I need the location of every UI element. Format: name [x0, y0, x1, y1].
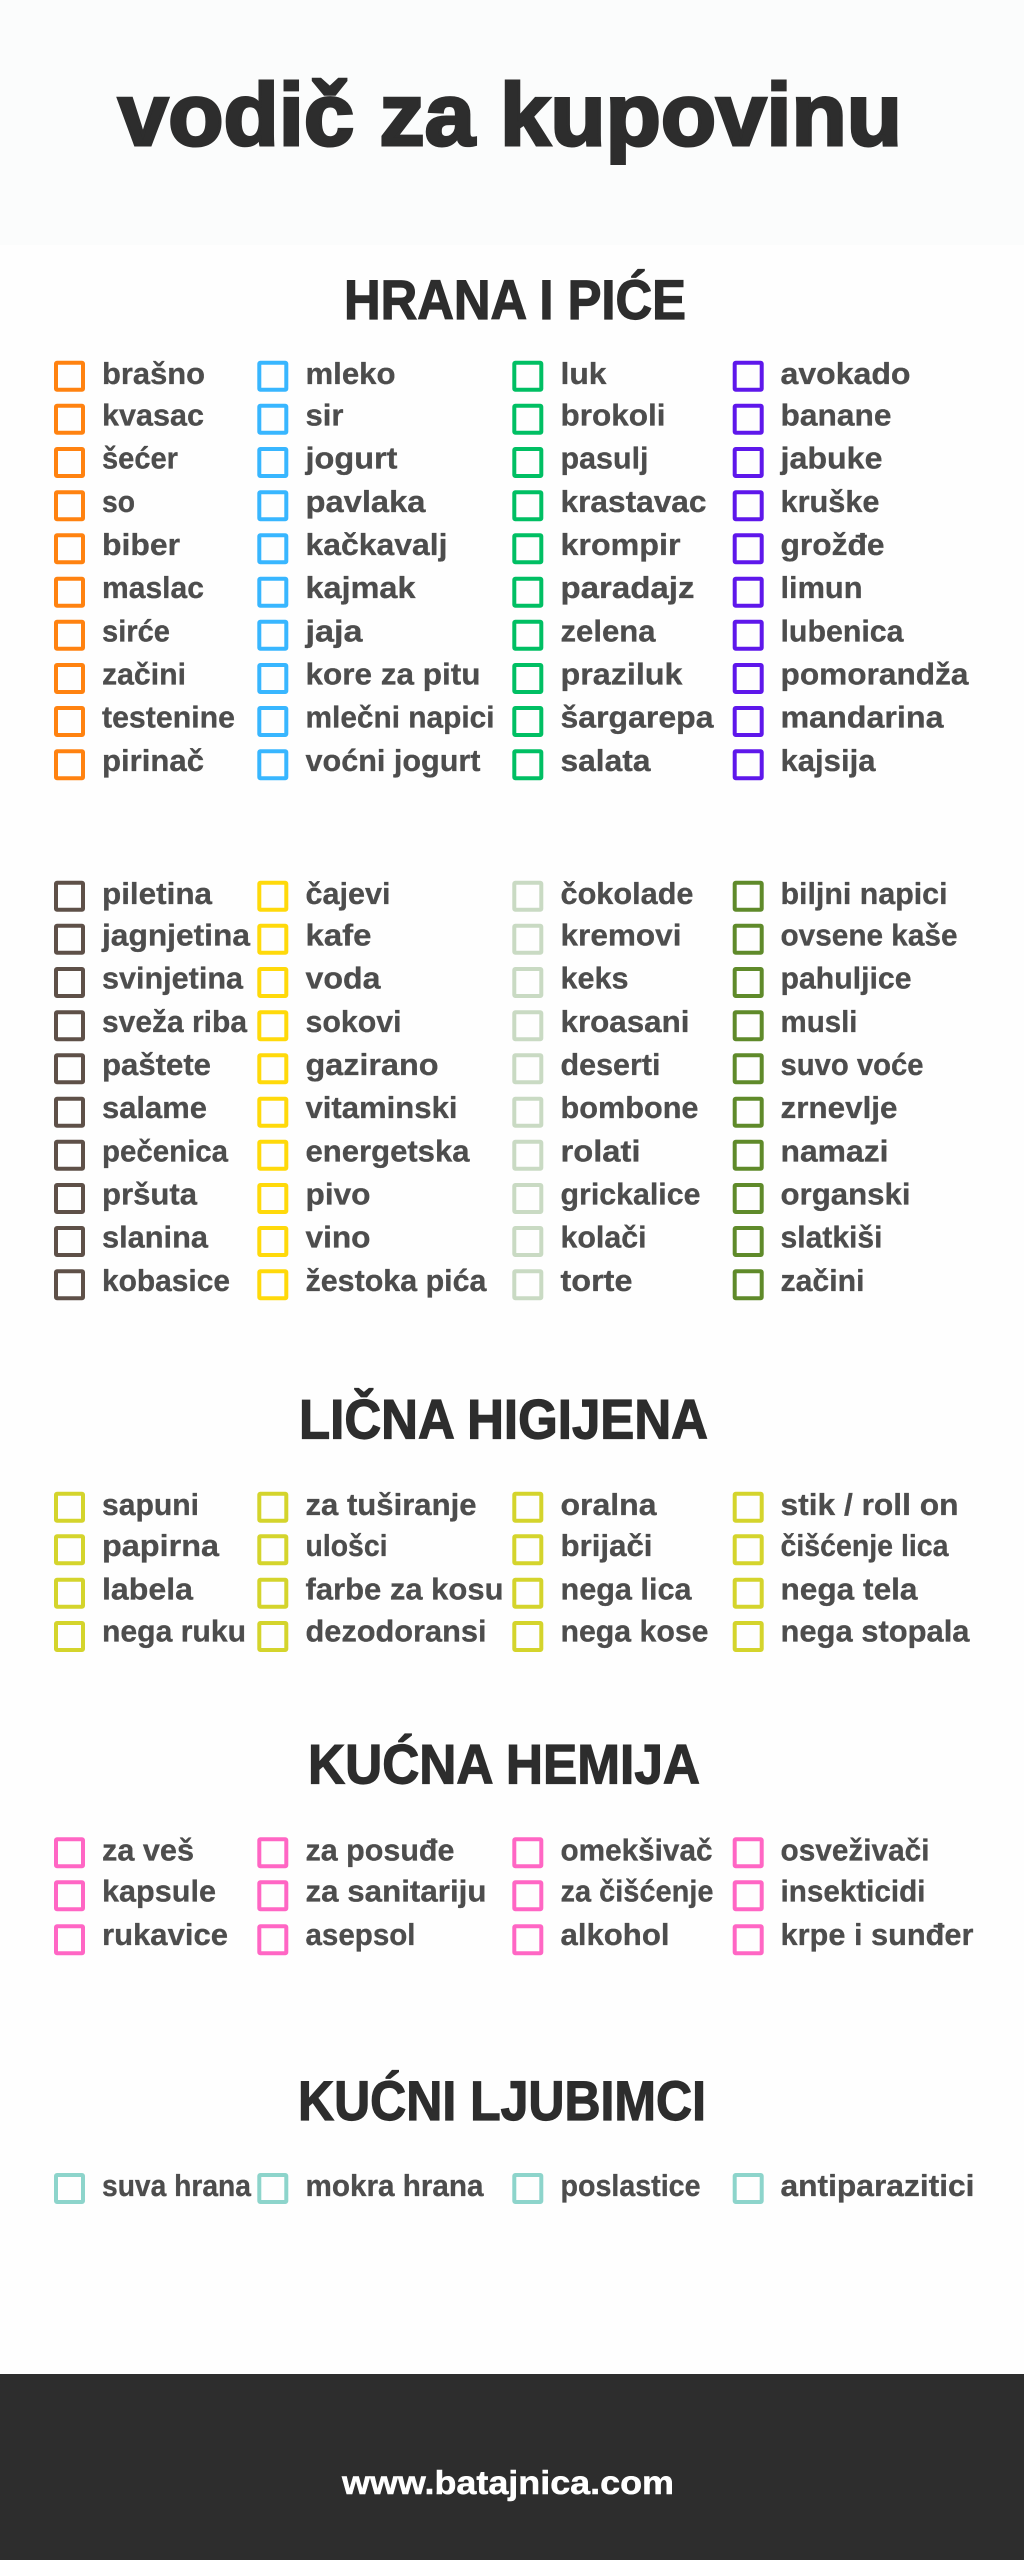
item: začini [735, 1264, 864, 1298]
item: mleko [259, 357, 396, 391]
item: žestoka pića: žestoka pića [306, 1264, 488, 1298]
item: paštete [56, 1048, 211, 1082]
item: za čišćenje: za čišćenje [560, 1874, 714, 1908]
item: nega tela: nega tela [780, 1572, 919, 1606]
item: pršuta: pršuta [102, 1178, 198, 1212]
item: luk: luk [560, 357, 607, 391]
item: ulošci: ulošci [306, 1529, 388, 1563]
item: sokovi: sokovi [306, 1005, 402, 1039]
item: pivo [259, 1178, 370, 1212]
footer url: www.batajnica.com [341, 2464, 674, 2501]
item: kapsule: kapsule [102, 1874, 216, 1908]
item: sokovi [259, 1005, 402, 1039]
item: jabuke [735, 442, 882, 476]
item: oralna: oralna [560, 1488, 658, 1522]
item: salata [514, 744, 652, 778]
column: brown checklist [56, 877, 251, 1298]
item: mlečni napici: mlečni napici [306, 700, 494, 734]
item: torte [514, 1264, 632, 1298]
item: brokoli: brokoli [560, 398, 666, 432]
panel: kućni ljubimci [56, 2069, 974, 2203]
item: labela: labela [102, 1572, 194, 1606]
item: zelena: zelena [560, 614, 657, 648]
item: lubenica: lubenica [780, 614, 905, 648]
item: musli [735, 1005, 858, 1039]
item: bombone: bombone [560, 1091, 698, 1125]
item: testenine: testenine [102, 700, 235, 734]
item: dezodoransi: dezodoransi [306, 1615, 486, 1649]
item: labela [56, 1572, 194, 1607]
item: antiparazitici: antiparazitici [780, 2169, 974, 2203]
item: biljni napici: biljni napici [780, 877, 948, 911]
item: praziluk: praziluk [560, 658, 683, 692]
item: pahuljice: pahuljice [780, 962, 912, 996]
item: kajmak [259, 571, 416, 606]
item: limun: limun [780, 571, 862, 605]
item: zelena [514, 614, 657, 649]
item: kafe: kafe [306, 918, 372, 952]
item: kolači: kolači [560, 1220, 646, 1254]
item: za veš: za veš [102, 1833, 194, 1867]
item: pivo: pivo [306, 1178, 370, 1212]
item: brijači: brijači [560, 1529, 652, 1563]
item: nega stopala: nega stopala [780, 1615, 971, 1649]
item: sirće: sirće [102, 614, 170, 648]
item: voćni jogurt: voćni jogurt [306, 744, 480, 778]
item: jabuke: jabuke [779, 442, 882, 476]
item: kačkavalj: kačkavalj [306, 528, 448, 562]
item: čajevi: čajevi [306, 877, 390, 911]
item: krompir: krompir [560, 528, 681, 562]
item: sirće [56, 614, 170, 649]
item: torte: torte [560, 1264, 632, 1298]
item: grožđe [735, 528, 884, 562]
item: voda: voda [306, 962, 382, 996]
item: brašno [56, 357, 205, 391]
item: asepsol: asepsol [306, 1918, 416, 1952]
item: poslastice: poslastice [560, 2169, 700, 2203]
item: grickalice: grickalice [560, 1178, 700, 1212]
panel: lična higijena [56, 1387, 971, 1650]
item: pasulj: pasulj [560, 442, 648, 476]
item: praziluk [514, 658, 683, 692]
item: kafe [259, 918, 372, 953]
column: purple checklist [735, 357, 970, 778]
item: osveživači: osveživači [780, 1833, 930, 1867]
item: salame [56, 1091, 207, 1126]
item: energetska: energetska [306, 1134, 471, 1168]
item: biber: biber [102, 528, 180, 562]
item: pršuta [56, 1178, 198, 1212]
column: yellow checklist [259, 877, 488, 1298]
item: krpe i sunđer: krpe i sunđer [780, 1918, 974, 1952]
item: začini: začini [102, 658, 186, 692]
item: rolati: rolati [560, 1134, 640, 1168]
item: kajmak: kajmak [306, 571, 416, 605]
item: jaja: jaja [304, 614, 364, 648]
item: ulošci [259, 1529, 388, 1563]
item: paradajz: paradajz [560, 571, 694, 605]
item: maslac: maslac [102, 571, 204, 605]
item: vino [259, 1220, 370, 1255]
item: kruške: kruške [780, 485, 880, 519]
item: keks: keks [560, 962, 628, 996]
item: piletina: piletina [102, 877, 213, 911]
item: kolači [514, 1220, 646, 1255]
item: limun [735, 571, 862, 606]
item: kajsija [735, 744, 877, 778]
item: papirna: papirna [102, 1529, 220, 1563]
item: alkohol: alkohol [560, 1918, 670, 1952]
item: pirinač: pirinač [102, 744, 204, 778]
item: brašno: brašno [102, 357, 205, 391]
item: krastavac: krastavac [560, 485, 707, 519]
item: za veš [56, 1833, 194, 1867]
heading: kućni ljubimci: KUĆNI LJUBIMCI [298, 2069, 706, 2132]
item: čišćenje lica: čišćenje lica [780, 1529, 949, 1563]
item: šargarepa: šargarepa [560, 700, 715, 734]
item: voda [259, 962, 382, 996]
item: jogurt [259, 442, 398, 476]
item: paradajz [514, 571, 694, 606]
item: kremovi [514, 918, 682, 953]
item: organski: organski [780, 1178, 910, 1212]
item: čokolade: čokolade [560, 877, 694, 911]
item: salame: salame [102, 1091, 207, 1125]
panel: kućna hemija [56, 1732, 974, 1953]
item: kore za pitu: kore za pitu [306, 658, 480, 692]
column: green checklist [514, 357, 715, 778]
item: musli: musli [780, 1005, 858, 1039]
item: insekticidi: insekticidi [780, 1874, 926, 1908]
item: sveža riba: sveža riba [102, 1005, 248, 1039]
item: pečenica: pečenica [102, 1134, 229, 1168]
item: biber [56, 528, 180, 562]
item: banane [735, 398, 892, 433]
item: slatkiši [735, 1220, 882, 1255]
item: pomorandža: pomorandža [780, 658, 970, 692]
item: slanina: slanina [102, 1220, 209, 1254]
column: orange checklist [56, 357, 235, 778]
item: pirinač [56, 744, 204, 778]
item: kroasani: kroasani [560, 1005, 690, 1039]
item: vitaminski: vitaminski [306, 1091, 458, 1125]
item: omekšivač: omekšivač [560, 1833, 713, 1867]
footer band [0, 2374, 1024, 2560]
item: mleko: mleko [306, 357, 396, 391]
item: šećer: šećer [102, 442, 178, 476]
item: svinjetina: svinjetina [102, 962, 244, 996]
item: maslac [56, 571, 204, 606]
item: slanina [56, 1220, 209, 1255]
item: mokra hrana: mokra hrana [306, 2169, 485, 2203]
heading: hrana i piće: HRANA I PIĆE [344, 268, 686, 331]
item: ovsene kaše: ovsene kaše [780, 918, 958, 952]
item: pasulj [514, 442, 648, 476]
item: jogurt: jogurt [304, 442, 398, 476]
item: nega ruku: nega ruku [102, 1615, 246, 1649]
item: gazirano: gazirano [306, 1048, 438, 1082]
item: šećer [56, 442, 178, 476]
column: pale green checklist [514, 877, 700, 1298]
item: namazi: namazi [780, 1134, 888, 1168]
item: zrnevlje [735, 1091, 898, 1126]
item: pavlaka [259, 485, 427, 519]
item: suvo voće: suvo voće [780, 1048, 924, 1082]
heading: lična higijena: LIČNA HIGIJENA [299, 1387, 708, 1450]
item: kapsule [56, 1874, 216, 1909]
item: keks [514, 962, 628, 996]
item: kvasac: kvasac [102, 398, 204, 432]
item: pavlaka: pavlaka [306, 485, 427, 519]
item: kremovi: kremovi [560, 918, 682, 952]
heading: kućna hemija: KUĆNA HEMIJA [308, 1732, 700, 1795]
item: kvasac [56, 398, 204, 433]
item: papirna [56, 1529, 220, 1563]
checklist: lična higijena [56, 1488, 971, 1650]
column: blue checklist [259, 357, 494, 778]
checklist: kućni ljubimci [56, 2169, 974, 2203]
item: alkohol [514, 1918, 670, 1953]
item: vino: vino [306, 1220, 370, 1254]
item: mandarina: mandarina [780, 700, 945, 734]
item: rukavice: rukavice [102, 1918, 228, 1952]
item: kajsija: kajsija [780, 744, 877, 778]
item: so: so [102, 485, 135, 519]
item: krompir [514, 528, 681, 562]
item: nega kose: nega kose [560, 1615, 708, 1649]
item: suva hrana: suva hrana [102, 2169, 252, 2203]
item: kruške [735, 485, 880, 519]
item: banane: banane [780, 398, 892, 432]
item: so [56, 485, 135, 519]
item: asepsol [259, 1918, 416, 1953]
item: kobasice: kobasice [102, 1264, 230, 1298]
item: grožđe: grožđe [780, 528, 884, 562]
item: brokoli [514, 398, 666, 433]
item: čajevi [259, 877, 390, 911]
item: sapuni: sapuni [102, 1488, 199, 1522]
item: za tuširanje: za tuširanje [306, 1488, 476, 1522]
item: gazirano [259, 1048, 438, 1082]
item: salata: salata [560, 744, 652, 778]
item: za sanitariju: za sanitariju [306, 1874, 486, 1908]
checklist: kućna hemija [56, 1833, 974, 1953]
item: farbe za kosu: farbe za kosu [306, 1572, 504, 1606]
item: jagnjetina: jagnjetina [101, 918, 251, 952]
item: sapuni [56, 1488, 199, 1522]
item: piletina [56, 877, 213, 911]
item: deserti: deserti [560, 1048, 660, 1082]
header band [0, 0, 1024, 245]
item: sir [259, 398, 344, 433]
item: začini: začini [780, 1264, 864, 1298]
item: rolati [514, 1134, 640, 1169]
item: slatkiši: slatkiši [780, 1220, 882, 1254]
item: paštete: paštete [102, 1048, 211, 1082]
panel: hrana i piće [56, 268, 970, 1298]
item: namazi [735, 1134, 888, 1169]
column: olive checklist [735, 877, 958, 1298]
item: deserti [514, 1048, 660, 1082]
item: oralna [514, 1488, 658, 1522]
item: luk [514, 357, 607, 391]
item: zrnevlje: zrnevlje [780, 1091, 898, 1125]
title: vodič za kupovinu [118, 65, 902, 164]
item: jaja [259, 614, 364, 649]
item: nega lica: nega lica [560, 1572, 693, 1606]
item: sir: sir [306, 398, 344, 432]
item: za posuđe: za posuđe [306, 1833, 454, 1867]
item: rukavice [56, 1918, 228, 1953]
item: brijači [514, 1529, 652, 1563]
item: avokado: avokado [780, 357, 910, 391]
item: stik / roll on: stik / roll on [780, 1488, 958, 1522]
item: začini [56, 658, 186, 692]
